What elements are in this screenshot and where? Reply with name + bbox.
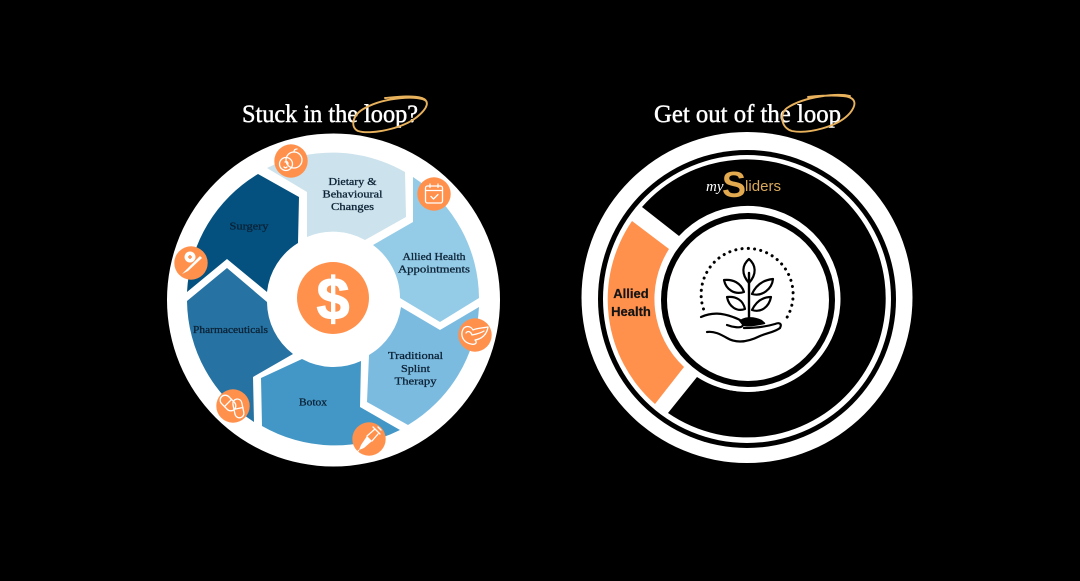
icon: apples [274,144,308,178]
hub: dollar cost [297,262,369,334]
icon: pills [216,389,250,423]
segment: traditional splint therapy: Splint [401,363,430,375]
icon: splint [458,318,492,352]
hub: dollar cost: $ [317,266,349,332]
segment: surgery: Surgery [230,220,269,232]
logo: mySliders: my [706,179,724,195]
segment: allied health appointments [373,177,479,322]
icon: scalpel and medical cross [174,246,208,280]
ring segment: allied health [608,221,684,404]
ring segment: allied health: Health [611,304,651,319]
logo: mySliders: liders [745,179,781,195]
segment: allied health appointments: Appointments [398,264,470,276]
logo: mySliders [706,164,781,205]
segment: botox [261,359,400,445]
ring segment: remaining black [642,159,886,437]
heading: get out of the loop [654,95,854,132]
segment: dietary and behavioural changes: Changes [331,201,374,213]
segment: dietary and behavioural changes [267,153,406,240]
segment: pharmaceuticals [187,268,293,422]
icon: plant in hand [701,248,793,342]
heading: get out of the loop: Get out of the loop [654,101,841,128]
segment: traditional splint therapy [367,307,479,425]
segment: dietary and behavioural changes: Behavioural [322,188,382,200]
segment: dietary and behavioural changes: Dietary & [328,176,377,188]
segment: traditional splint therapy: Traditional [388,350,443,362]
panel: cycle wheel [167,134,500,466]
hub: growth [656,208,840,392]
segment: pharmaceuticals: Pharmaceuticals [193,324,268,336]
ring segment: allied health: Allied [613,286,649,301]
icon: calendar [417,177,451,211]
logo: mySliders: S [722,164,746,205]
segment: botox: Botox [299,396,328,408]
panel: mySliders ring [582,132,912,463]
icon: syringe [352,422,386,456]
segment: traditional splint therapy: Therapy [394,376,437,388]
segment: allied health appointments: Allied Health [402,251,466,263]
heading: stuck in the loop: Stuck in the loop? [242,101,418,128]
segment: surgery [187,174,299,292]
icon: soil mound [739,317,765,326]
